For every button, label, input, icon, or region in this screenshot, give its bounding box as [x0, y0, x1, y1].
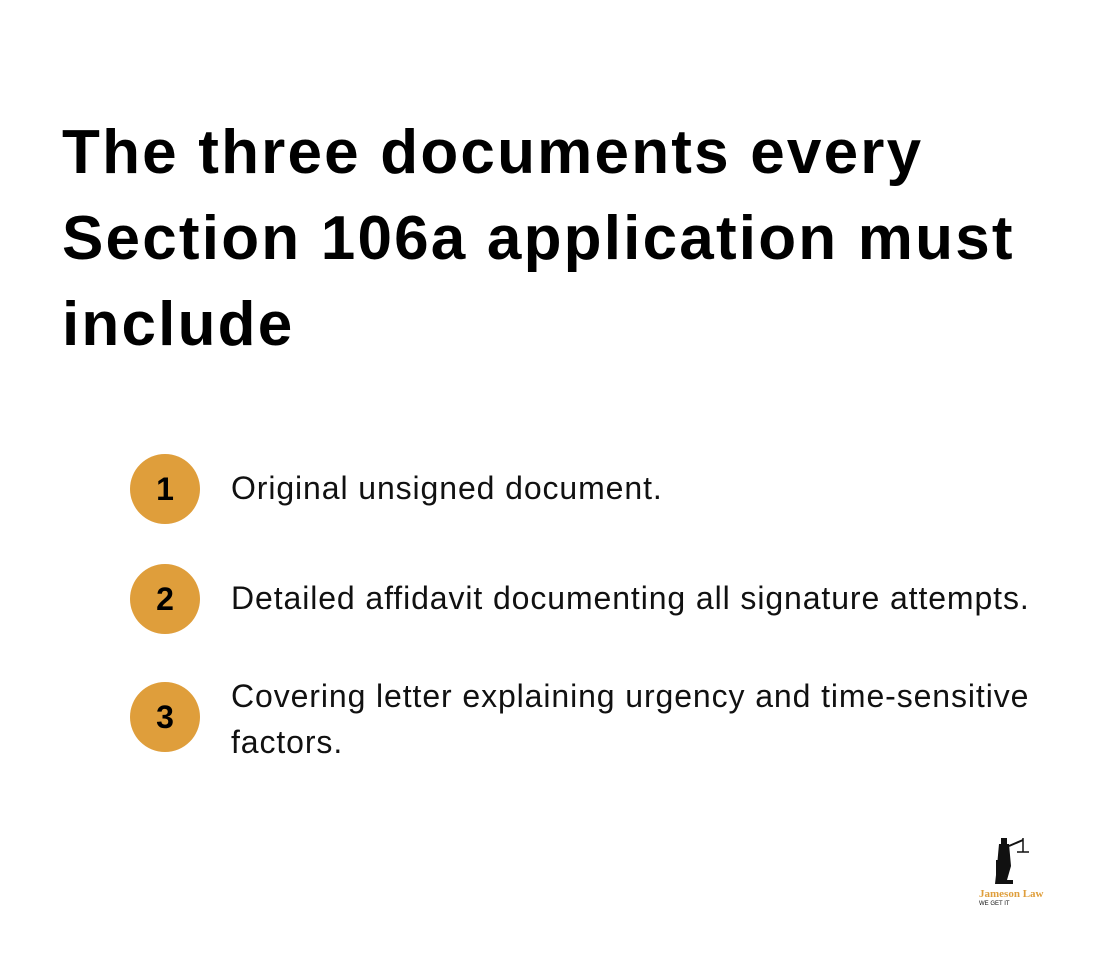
logo	[979, 838, 1044, 907]
text 1: Original unsigned document.	[231, 470, 663, 506]
item 2	[130, 564, 1030, 634]
number circle 1	[130, 454, 200, 524]
text 2: Detailed affidavit documenting all signature attempts.	[231, 580, 1030, 616]
number circle 2	[130, 564, 200, 634]
logo: WE GET IT	[979, 901, 1010, 907]
title	[62, 118, 1015, 359]
text 3: factors.	[231, 724, 343, 760]
item 3	[130, 678, 1029, 760]
number circle 3	[130, 682, 200, 752]
logo text: Jameson Law	[979, 888, 1043, 900]
title: The three documents every	[62, 118, 923, 187]
item 1	[130, 454, 663, 524]
icon: lady justice	[995, 838, 1029, 884]
number circle 2: 2	[156, 581, 174, 617]
title: include	[62, 290, 294, 359]
number circle 3: 3	[156, 699, 174, 735]
text 3: Covering letter explaining urgency and time-sensitive	[231, 678, 1029, 714]
number circle 1: 1	[156, 471, 174, 507]
title: Section 106a application must	[62, 204, 1015, 273]
text 3	[231, 678, 1029, 760]
